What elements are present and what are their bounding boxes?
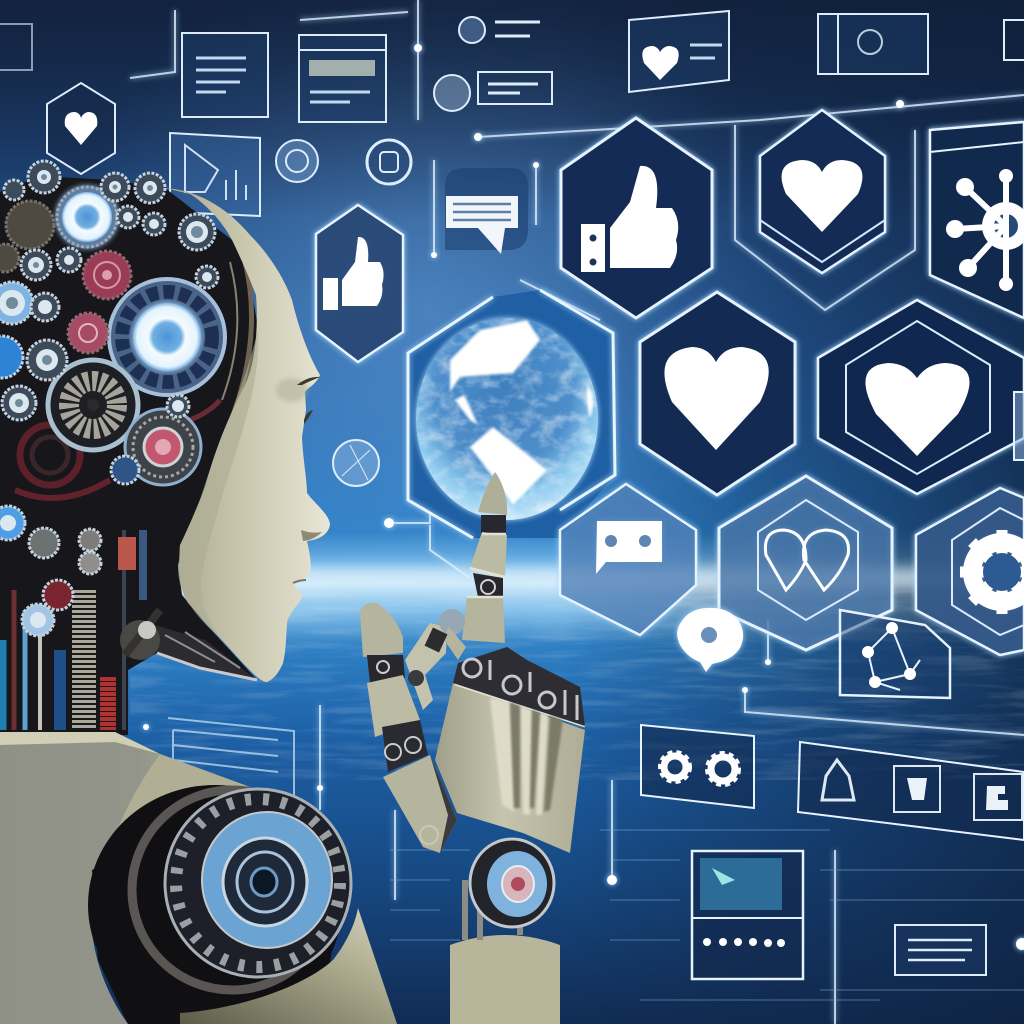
icon: medium thumbs-up hexagon [316,205,403,362]
icon: chat pin bubble [677,608,743,672]
panel: gears card [641,725,754,808]
gear: main lens [109,279,225,395]
hexagon: chat bubble low [560,484,696,635]
hexagon: globe [408,290,615,538]
gear: red small top [83,251,131,299]
knuckles [453,647,585,726]
gears: small cluster centres [0,170,212,628]
panel: data card [299,35,386,122]
index finger [462,472,507,643]
panel: chart card [170,133,260,216]
panel: media card with dots [692,851,803,979]
thumb base [383,755,457,853]
icon: small heart hexagon [47,83,115,174]
gears: small cluster [0,161,218,636]
wrist column [450,935,560,1024]
panel: molecule card [840,610,950,698]
panel: top media card [818,14,928,74]
robot brain gears [0,161,225,636]
panel: top-left card [0,24,32,70]
panel: network icon card [930,122,1024,318]
hexagon: heart right [818,300,1024,494]
thumb [360,603,428,772]
palm [435,683,585,853]
panel: top heart card [629,11,729,92]
robot inner mechanics [0,176,260,735]
hexagon: gear [916,488,1024,655]
icon: faint crossed circle [333,440,379,486]
gears: small cluster hubs [6,174,203,407]
panel: speech card [182,33,268,117]
panel: small text card [895,925,986,975]
gear: silver mesh [48,360,138,450]
faint data lines [390,830,1024,1000]
gear: top blue lens [57,187,117,247]
panel: right edge fragment [1014,392,1024,460]
robot head shell [165,188,330,682]
robot shoulder and torso [0,732,250,1024]
panel: lower left card [168,718,294,795]
hexagon: interlocked hearts [719,476,892,650]
lower shoulder shell [180,908,397,1024]
middle bent finger [405,609,466,710]
shoulder joint lens [88,785,351,1024]
icon: gauges [276,140,411,184]
gear: red lower [125,409,201,485]
robot raised hand [360,472,585,1024]
gear: red mid [68,313,108,353]
icon: chat bubble [445,168,528,254]
hexagon: heart centre [640,292,795,495]
panel: top right card [1004,20,1024,60]
hexagon: heart top [760,110,885,273]
icon: round badge pair [434,17,552,111]
hexagon: thumbs-up large [561,118,712,318]
icon: sparkle nodes [143,44,1024,950]
panel: top small icon row [0,11,1024,216]
wrist gear [470,839,554,927]
panel: three icon card [798,742,1024,840]
icon: earth globe [416,318,598,520]
